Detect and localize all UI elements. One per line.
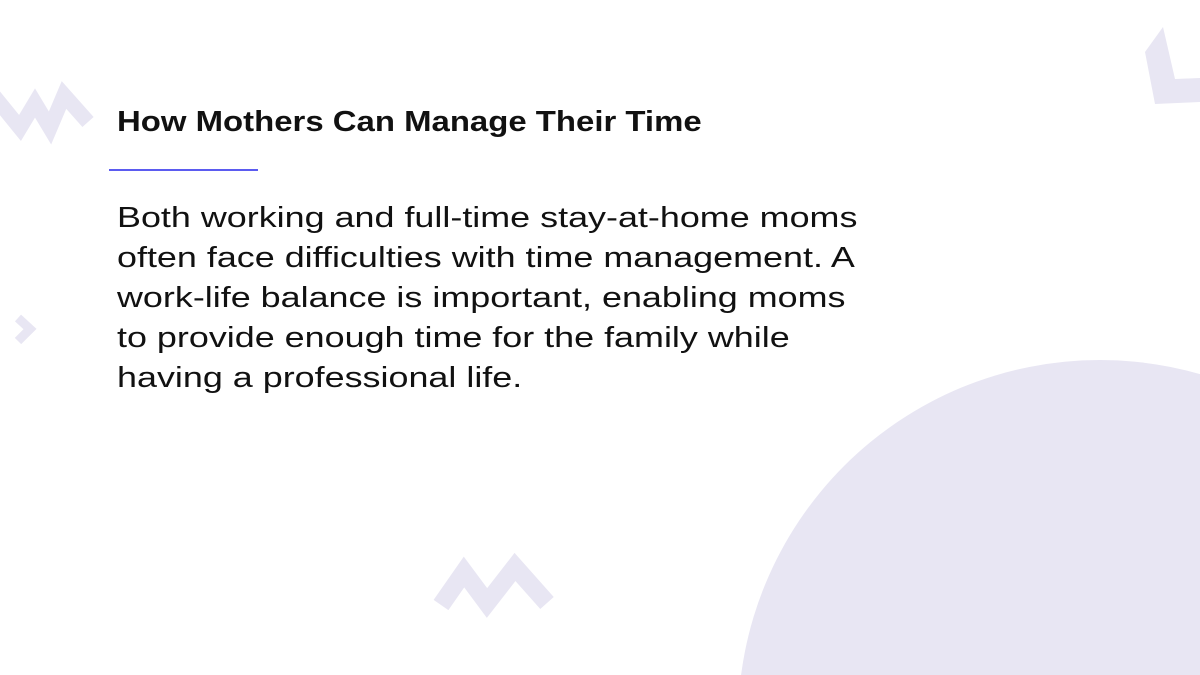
zigzag top-left xyxy=(0,95,88,128)
body text: having a professional life. xyxy=(117,362,522,394)
body text: Both working and full-time stay-at-home moms xyxy=(117,202,857,234)
title: How Mothers Can Manage Their Time xyxy=(117,106,702,138)
body text: to provide enough time for the family while xyxy=(117,322,790,354)
body text: often face difficulties with time management. A xyxy=(117,242,855,274)
decorative circle xyxy=(738,360,1200,675)
chevron xyxy=(18,318,30,341)
body text xyxy=(117,202,857,394)
accent underline xyxy=(109,169,258,171)
corner L shape xyxy=(1145,27,1200,104)
zigzag bottom xyxy=(441,567,547,605)
body text: work-life balance is important, enabling moms xyxy=(117,282,845,314)
